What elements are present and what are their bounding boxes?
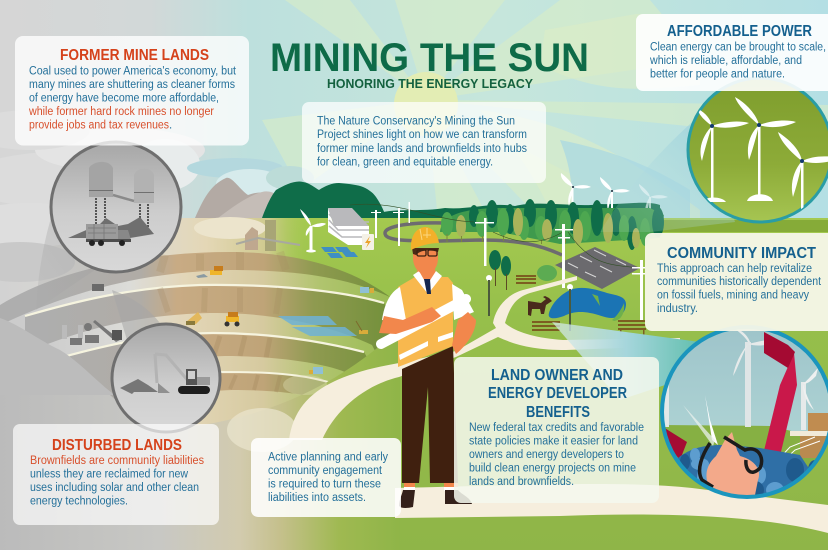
excavator body — [178, 369, 210, 394]
legs — [402, 346, 458, 483]
panel: land owner and energy developer benefits — [454, 357, 659, 503]
pit ground and gray haze — [0, 318, 400, 550]
light beam: community circle — [552, 322, 700, 400]
shirt sleeves — [382, 284, 474, 322]
turbine circle — [688, 78, 828, 223]
pit terraces — [0, 252, 400, 430]
panel: community impact — [645, 233, 828, 331]
piles — [68, 217, 154, 238]
neck and collar — [415, 265, 437, 288]
body text: provide jobs and tax revenues — [29, 120, 169, 132]
far green band — [660, 220, 828, 232]
panel: land owner and energy developer benefits: build clean energy projects on mine — [469, 462, 636, 474]
lawn — [0, 218, 828, 550]
panel: project intro: The Nature Conservancy's Mining the Sun — [317, 116, 515, 128]
title: MINING THE SUN — [270, 36, 589, 80]
panel: project intro: Project shines light on how we can transform — [317, 129, 527, 141]
panel: affordable power: which is reliable, affordable, and — [649, 55, 802, 67]
power lines — [350, 204, 640, 268]
panel: land owner and energy developer benefits: BENEFITS — [526, 404, 590, 421]
glasses — [417, 250, 437, 256]
panel: disturbed lands: DISTURBED LANDS — [52, 437, 182, 454]
panel: community impact: on fossil fuels, mining and heavy — [657, 290, 809, 302]
panel: project intro — [302, 102, 546, 183]
helmet — [411, 227, 439, 250]
solar field road — [555, 247, 640, 289]
building with battery — [328, 208, 374, 250]
roads — [289, 276, 828, 533]
panel: community impact: COMMUNITY IMPACT — [667, 245, 816, 262]
solar arrays in pit — [278, 316, 357, 336]
panel: disturbed lands: uses including solar and other clean — [30, 482, 199, 494]
right arm — [452, 312, 476, 354]
face — [413, 248, 438, 274]
panel: active planning: liabilities into assets. — [268, 492, 366, 504]
tan and gray hillside — [0, 218, 312, 328]
scissors — [683, 395, 762, 487]
panel: former mine lands — [15, 36, 249, 146]
mountains — [195, 178, 660, 225]
sky background — [0, 0, 828, 300]
truck — [86, 224, 131, 246]
panel: active planning: Active planning and early — [268, 452, 388, 464]
body text: while former hard rock mines no longer — [28, 106, 214, 118]
panel: community impact: industry. — [657, 303, 698, 315]
distant turbines — [561, 173, 668, 227]
person with blueprint — [379, 227, 476, 508]
panel: project intro: for clean, green and equitable energy. — [317, 156, 493, 168]
panel: community impact: This approach can help revitalize — [657, 263, 812, 275]
panel: active planning: is required to turn these — [268, 478, 381, 490]
shoes — [399, 483, 472, 508]
lower gray clouds — [0, 203, 266, 282]
deer — [528, 296, 552, 316]
panel: land owner and energy developer benefits: ENERGY DEVELOPER — [488, 385, 627, 402]
excavator arm — [155, 354, 190, 383]
crowd — [678, 445, 814, 495]
panel: affordable power: better for people and nature. — [650, 68, 785, 80]
park trees, lamps and benches — [486, 250, 646, 337]
body text: . — [169, 120, 172, 132]
panel: active planning — [251, 438, 401, 517]
heading: FORMER MINE LANDS — [60, 47, 209, 64]
panel: disturbed lands — [13, 424, 219, 525]
solar panels small — [321, 247, 358, 258]
body text — [28, 66, 237, 132]
body text: of energy have become more affordable, — [29, 92, 219, 104]
utility poles — [371, 202, 645, 320]
panel: active planning: community engagement — [268, 465, 383, 477]
panel: disturbed lands: unless they are reclaimed for new — [30, 468, 189, 480]
gray circle: former mine equipment — [51, 142, 181, 272]
tree line — [440, 199, 664, 250]
mining equipment in pit — [62, 266, 374, 374]
sun — [394, 72, 458, 136]
light beam: turbine circle — [600, 115, 735, 232]
foreground turbine — [300, 209, 326, 252]
panel: land owner and energy developer benefits: lands and brownfields. — [469, 476, 574, 488]
pile — [120, 379, 158, 394]
gray beams — [36, 205, 165, 350]
distant gray road — [385, 223, 562, 255]
panel: land owner and energy developer benefits: New federal tax credits and favorable — [469, 422, 644, 434]
panel: land owner and energy developer benefits: state policies make it easier for land — [469, 436, 638, 448]
panel: affordable power — [636, 14, 828, 91]
panel: disturbed lands: Brownfields are community liabilities — [30, 455, 204, 467]
hand — [706, 432, 759, 495]
vest — [398, 277, 453, 367]
panel: project intro: former mine lands and brownfields into hubs — [317, 143, 527, 155]
clouds — [0, 110, 314, 208]
mine shaft towers — [236, 220, 300, 251]
silos — [89, 162, 154, 230]
community circle — [660, 327, 828, 500]
pond — [549, 288, 626, 321]
blueprint roll — [381, 299, 466, 344]
panel: disturbed lands: energy technologies. — [30, 496, 128, 508]
subtitle: HONORING THE ENERGY LEGACY — [327, 76, 533, 91]
panel: land owner and energy developer benefits: LAND OWNER AND — [491, 367, 623, 384]
panel: land owner and energy developer benefits: owners and energy developers to — [469, 449, 624, 461]
left arm — [379, 307, 441, 334]
gray circle: excavator — [112, 324, 220, 432]
body text: many mines are shuttering as cleaner forms — [29, 79, 235, 91]
body text: Coal used to power America's economy, but — [29, 66, 237, 78]
